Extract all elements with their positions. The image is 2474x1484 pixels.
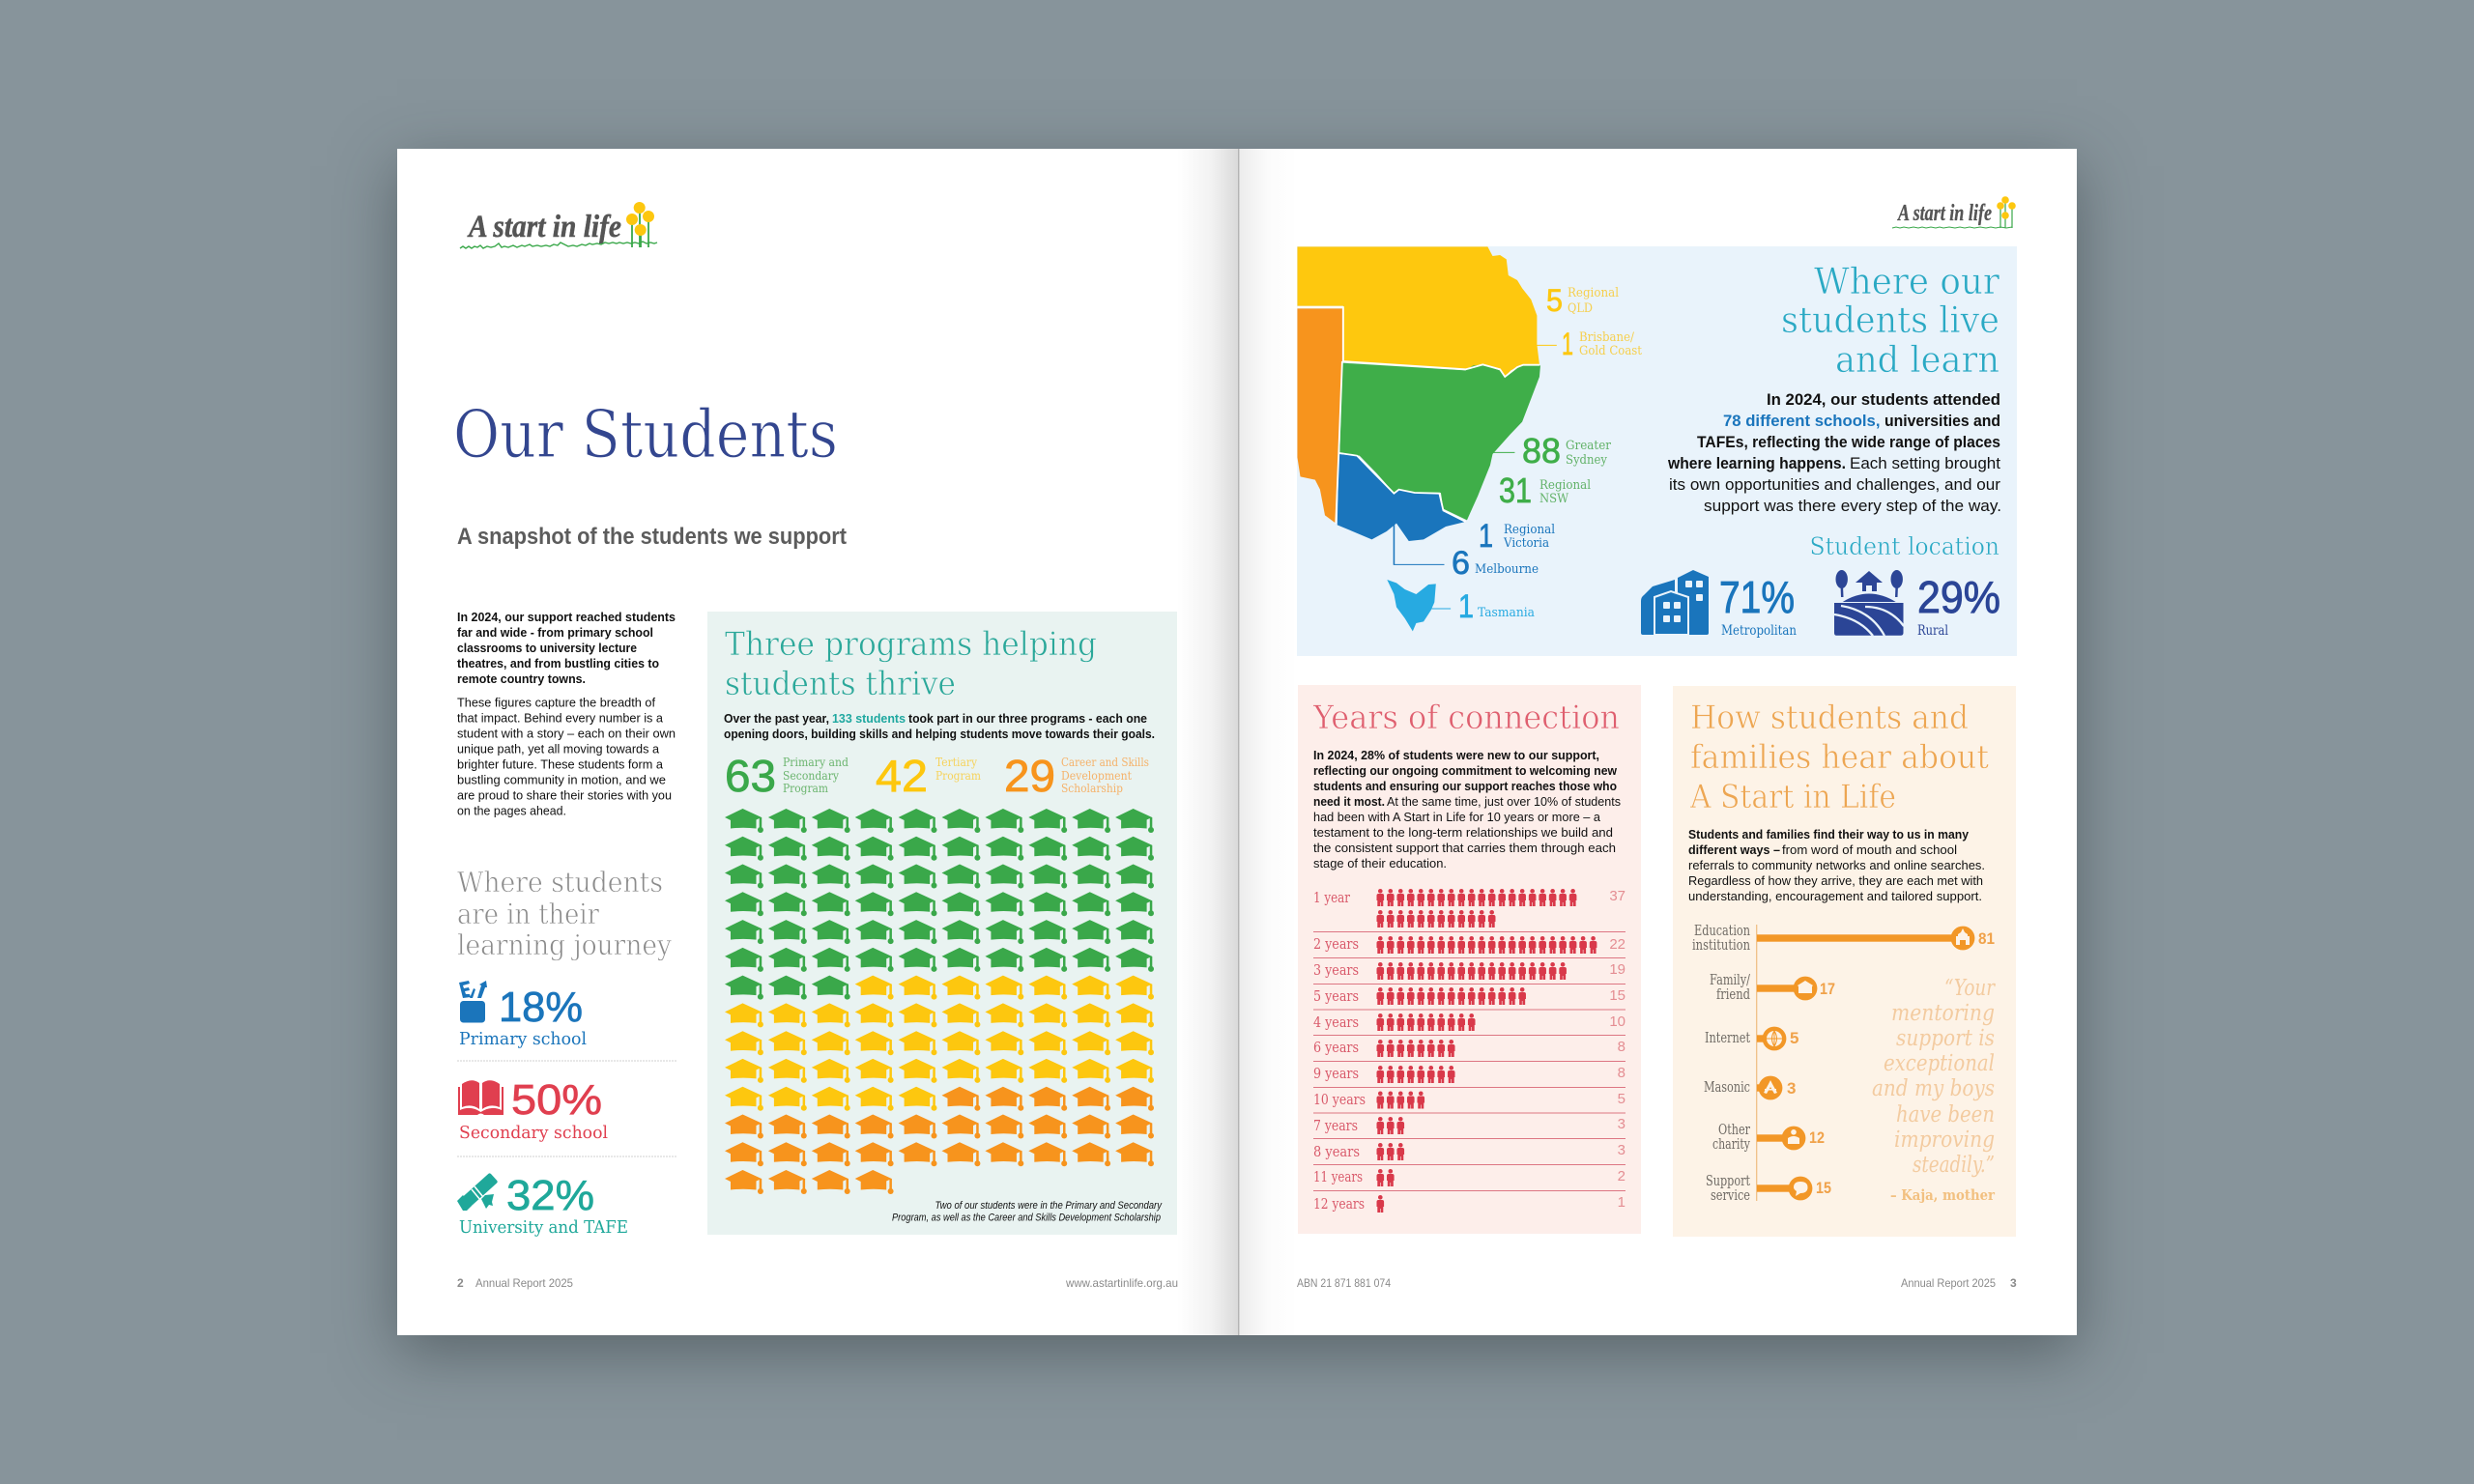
stat: 29 career and skills: Development [1061, 768, 1132, 783]
chart values: 3 [1618, 1142, 1625, 1158]
intro text: on the pages ahead. [457, 804, 566, 817]
chart labels: years: 9 years [1313, 1067, 1359, 1082]
stat: secondary school: 50% [511, 1076, 602, 1124]
footnote: Two of our students were in the Primary and Secondary [935, 1200, 1163, 1212]
intro text [457, 610, 676, 817]
intro text: are proud to share their stories with you [457, 788, 672, 802]
chart category labels: charity [1712, 1137, 1751, 1153]
map labels: Queensland: Gold Coast [1579, 344, 1643, 358]
chart values: 15 [1816, 1179, 1831, 1197]
chart rules [1313, 931, 1625, 1190]
chart values: 5 [1618, 1091, 1625, 1107]
how students text: Students and families find their way to us in many [1688, 827, 1970, 842]
stat: primary school: 18% [499, 984, 583, 1031]
years text: stage of their education. [1313, 856, 1447, 870]
chart category labels: Internet [1705, 1031, 1750, 1046]
intro text: far and wide - from primary school [457, 625, 653, 640]
footer: right page: ABN 21 871 881 074 [1297, 1276, 1391, 1290]
footer: right page: Annual Report 2025 [1901, 1276, 1996, 1290]
map labels: New South Wales: 31 [1499, 471, 1532, 510]
how students text: understanding, encouragement and tailored support. [1688, 889, 1982, 903]
chart labels: years: 5 years [1313, 989, 1359, 1005]
map labels: Victoria [1452, 518, 1555, 582]
years text: the consistent support that carries them through each [1313, 841, 1616, 855]
years text: In 2024, 28% of students were new to our support, [1313, 748, 1599, 762]
intro text: classrooms to university lecture [457, 641, 637, 655]
chart values: 10 [1609, 1013, 1625, 1030]
years text: need it most. [1313, 794, 1385, 809]
heading: how students hear: families hear about [1690, 738, 1989, 777]
programs intro text: Over the past year, [724, 711, 829, 726]
chart values: 3 [1787, 1079, 1796, 1098]
stat: 63 primary and secondary: Secondary [783, 768, 840, 783]
programs intro text [724, 711, 1155, 741]
map labels: New South Wales: Regional [1539, 478, 1591, 493]
heading: where students are in their learning journey: Where students [457, 866, 663, 899]
map labels: Queensland: 5 [1546, 283, 1563, 318]
chart category labels: friend [1716, 987, 1750, 1003]
stat: 29 career and skills: Career and Skills [1061, 755, 1149, 769]
chart values [1609, 888, 1625, 1211]
chart category labels: Education [1694, 924, 1750, 939]
heading: three programs: Three programs helping [725, 625, 1097, 664]
map labels: Tasmania: 1 [1458, 588, 1474, 625]
map labels: Victoria: 1 [1479, 518, 1493, 555]
chart category labels: Family/ [1710, 973, 1750, 988]
map labels: New South Wales: 88 [1522, 431, 1561, 471]
map labels: Victoria: Victoria [1503, 536, 1549, 551]
chart category labels: Other [1718, 1123, 1750, 1138]
stat: 29 career and skills [1004, 751, 1149, 801]
location text: Each setting brought [1850, 454, 2000, 472]
location text: support was there every step of the way. [1704, 497, 2001, 515]
intro text: These figures capture the breadth of [457, 696, 655, 709]
panel: years of connection [1298, 685, 1641, 1234]
years text: had been with A Start in Life for 10 years or more – a [1313, 810, 1601, 824]
how students text: referrals to community networks and online searches. [1688, 858, 1985, 872]
intro text: In 2024, our support reached students [457, 610, 676, 624]
how students text: Regardless of how they arrive, they are each met with [1688, 873, 1983, 888]
map labels: Queensland: 1 [1562, 327, 1573, 361]
chart values: 15 [1609, 987, 1625, 1004]
how students text [1688, 827, 1985, 903]
map labels: Tasmania [1458, 588, 1535, 625]
quote: mentoring [1891, 1001, 1995, 1026]
programs intro text: 133 students [832, 711, 906, 726]
chart labels: years: 3 years [1313, 963, 1359, 979]
years text: students and ensuring our support reaches those who [1313, 779, 1617, 793]
chart values: 1 [1618, 1194, 1625, 1211]
stat: university and TAFE: University and TAFE [459, 1217, 628, 1238]
open brochure pages [397, 149, 2077, 1335]
map labels: New South Wales: NSW [1539, 492, 1569, 506]
chart values: 2 [1618, 1168, 1625, 1184]
chart values: 5 [1790, 1029, 1798, 1047]
map labels: New South Wales: Greater [1566, 439, 1612, 453]
heading: where students are in their learning journey: learning journey [457, 928, 673, 961]
chart values: 37 [1609, 888, 1625, 904]
chart values [1787, 929, 1995, 1197]
map labels: Victoria: Melbourne [1475, 562, 1539, 577]
panel: how students and families hear [1673, 686, 2016, 1237]
heading: years of connection: Years of connection [1312, 699, 1620, 737]
chart values: 19 [1609, 961, 1625, 978]
logo: A start in life (left page) [460, 202, 657, 248]
stat: secondary school: Secondary school [459, 1123, 608, 1143]
subtitle: A snapshot of the students we support [457, 524, 847, 550]
stat: rural: 29% [1917, 572, 2000, 622]
quote [1872, 976, 1997, 1204]
intro text: remote country towns. [457, 671, 586, 686]
heading: how students hear [1689, 699, 1989, 816]
years text [1313, 748, 1621, 870]
heading: three programs: students thrive [725, 665, 956, 703]
heading: where our students live and learn: students live [1781, 300, 1999, 341]
stat: 42 tertiary: Program [935, 768, 981, 783]
location text: universities and [1884, 412, 2000, 430]
heading: where students are in their learning journey: are in their [457, 898, 599, 930]
stat: primary school: Primary school [459, 1029, 587, 1049]
years text: At the same time, just over 10% of students [1387, 794, 1621, 809]
heading: student location: Student location [1809, 532, 1999, 560]
how students text: different ways – [1688, 842, 1780, 857]
chart category labels: Support [1706, 1174, 1750, 1189]
chart icons [1764, 928, 1970, 1196]
footer: left page: 2 [457, 1276, 464, 1290]
programs intro text: opening doors, building skills and helping students move towards their goals. [724, 727, 1155, 741]
heading: where our students live and learn [1781, 261, 1999, 381]
chart labels: years: 7 years [1313, 1119, 1358, 1134]
quote: steadily.” [1913, 1153, 1995, 1178]
map labels: Victoria: 6 [1452, 545, 1470, 582]
chart values: 17 [1820, 980, 1835, 998]
stat: rural: Rural [1917, 623, 1948, 639]
stat: 42 tertiary: 42 [876, 751, 928, 801]
stat: 42 tertiary [876, 751, 981, 801]
logo: A start in life (left page): A start in life [467, 210, 621, 244]
stat: metropolitan: Metropolitan [1721, 623, 1797, 639]
stat: 63 primary and secondary [725, 751, 849, 801]
quote: “Your [1944, 976, 1997, 1001]
chart labels: years: 10 years [1313, 1093, 1366, 1108]
pictogram: graduation caps [725, 809, 1154, 1194]
years text: testament to the long-term relationships we build and [1313, 825, 1613, 840]
intro text: bustling community in motion, and we [457, 773, 666, 786]
heading: where students are in their learning journey [457, 866, 673, 961]
intro text: that impact. Behind every number is a [457, 711, 664, 725]
map labels: Queensland: Brisbane/ [1579, 330, 1635, 345]
stat: university and TAFE [457, 1172, 628, 1238]
chart values: 8 [1618, 1065, 1625, 1081]
stat: 63 primary and secondary: 63 [725, 751, 776, 801]
location text: 78 different schools, [1723, 412, 1881, 430]
chart labels: years: 4 years [1313, 1015, 1359, 1031]
quote: and my boys [1872, 1076, 1995, 1101]
quote: – Kaja, mother [1890, 1186, 1996, 1204]
map labels: Victoria: Regional [1504, 523, 1555, 537]
stat: 29 career and skills: 29 [1004, 751, 1055, 801]
map labels: Queensland [1546, 283, 1643, 361]
map labels: Queensland: Regional [1568, 286, 1619, 300]
footer: left page: www.astartinlife.org.au [1065, 1276, 1178, 1290]
footer: right page: 3 [2010, 1276, 2017, 1290]
chart category labels: Masonic [1704, 1080, 1750, 1096]
chart labels: years: 12 years [1313, 1197, 1365, 1213]
stat: 63 primary and secondary: Program [783, 781, 828, 795]
map labels: New South Wales [1499, 431, 1612, 510]
map labels: Tasmania: Tasmania [1478, 606, 1535, 620]
footer: left page [457, 1276, 1178, 1290]
how students text: from word of mouth and school [1782, 842, 1957, 857]
chart category labels: institution [1692, 938, 1750, 954]
chart category labels: service [1711, 1188, 1750, 1204]
chart labels: years: 11 years [1313, 1170, 1363, 1185]
panel: three programs [707, 612, 1177, 1235]
chart labels: years: 8 years [1313, 1145, 1360, 1160]
programs intro text: took part in our three programs - each one [908, 711, 1147, 726]
location text: where learning happens. [1667, 454, 1846, 472]
heading: where our students live and learn: and learn [1835, 339, 1999, 381]
heading: how students hear: How students and [1690, 699, 1969, 737]
heading: three programs [725, 625, 1097, 703]
footer: left page: Annual Report 2025 [475, 1276, 573, 1290]
stat: 29 career and skills: Scholarship [1061, 781, 1123, 795]
stat: university and TAFE: 32% [506, 1172, 594, 1219]
chart values: 81 [1978, 929, 1995, 948]
location text: TAFEs, reflecting the wide range of places [1697, 433, 2000, 451]
chart labels: years [1313, 891, 1366, 1213]
stat: metropolitan [1719, 572, 1797, 639]
heading: where our students live and learn: Where our [1814, 261, 1999, 302]
icon: rural landscape [1834, 570, 1904, 636]
map: south-east Australia [1297, 246, 1557, 631]
location text: its own opportunities and challenges, and our [1669, 475, 2000, 494]
chart bars [1757, 927, 1974, 1200]
chart values: 8 [1618, 1039, 1625, 1055]
chart category labels [1692, 924, 1751, 1204]
quote: improving [1894, 1127, 1995, 1153]
footnote: Program, as well as the Career and Skills Development Scholarship [892, 1212, 1161, 1223]
map labels: Queensland: QLD [1568, 301, 1593, 316]
footnote [892, 1200, 1163, 1223]
panel: where our students live and learn [1297, 246, 2017, 656]
years text: reflecting our ongoing commitment to welcoming new [1313, 763, 1618, 778]
icon: city buildings [1641, 570, 1709, 635]
stat: 63 primary and secondary: Primary and [783, 755, 849, 769]
chart values: 22 [1609, 936, 1625, 953]
quote: have been [1896, 1102, 1995, 1127]
logo: A start in life (right page): A start in life [1896, 201, 1992, 226]
title: Our Students [453, 396, 838, 473]
pictogram: people per year [1376, 889, 1597, 1213]
quote: support is [1896, 1026, 1995, 1051]
chart values: 12 [1809, 1128, 1825, 1147]
location text [1667, 390, 2001, 515]
stat: primary school [459, 981, 587, 1049]
intro text: theatres, and from bustling cities to [457, 656, 659, 671]
chart labels: years: 1 year [1313, 891, 1350, 906]
location text: In 2024, our students attended [1767, 390, 2000, 409]
intro text: brighter future. These students form a [457, 757, 664, 771]
intro text: student with a story – each on their own [457, 727, 676, 740]
chart values: 3 [1618, 1116, 1625, 1132]
map labels: New South Wales: Sydney [1566, 453, 1608, 468]
stat: metropolitan: 71% [1719, 572, 1795, 622]
stat: secondary school [458, 1076, 608, 1143]
intro text: unique path, yet all moving towards a [457, 742, 660, 756]
footer: right page [1297, 1276, 2017, 1290]
heading: how students hear: A Start in Life [1689, 778, 1896, 816]
chart labels: years: 2 years [1313, 937, 1359, 953]
chart: referral source [1692, 924, 1995, 1204]
chart labels: years: 6 years [1313, 1041, 1359, 1056]
stat: 42 tertiary: Tertiary [935, 755, 978, 769]
quote: exceptional [1884, 1051, 1995, 1076]
